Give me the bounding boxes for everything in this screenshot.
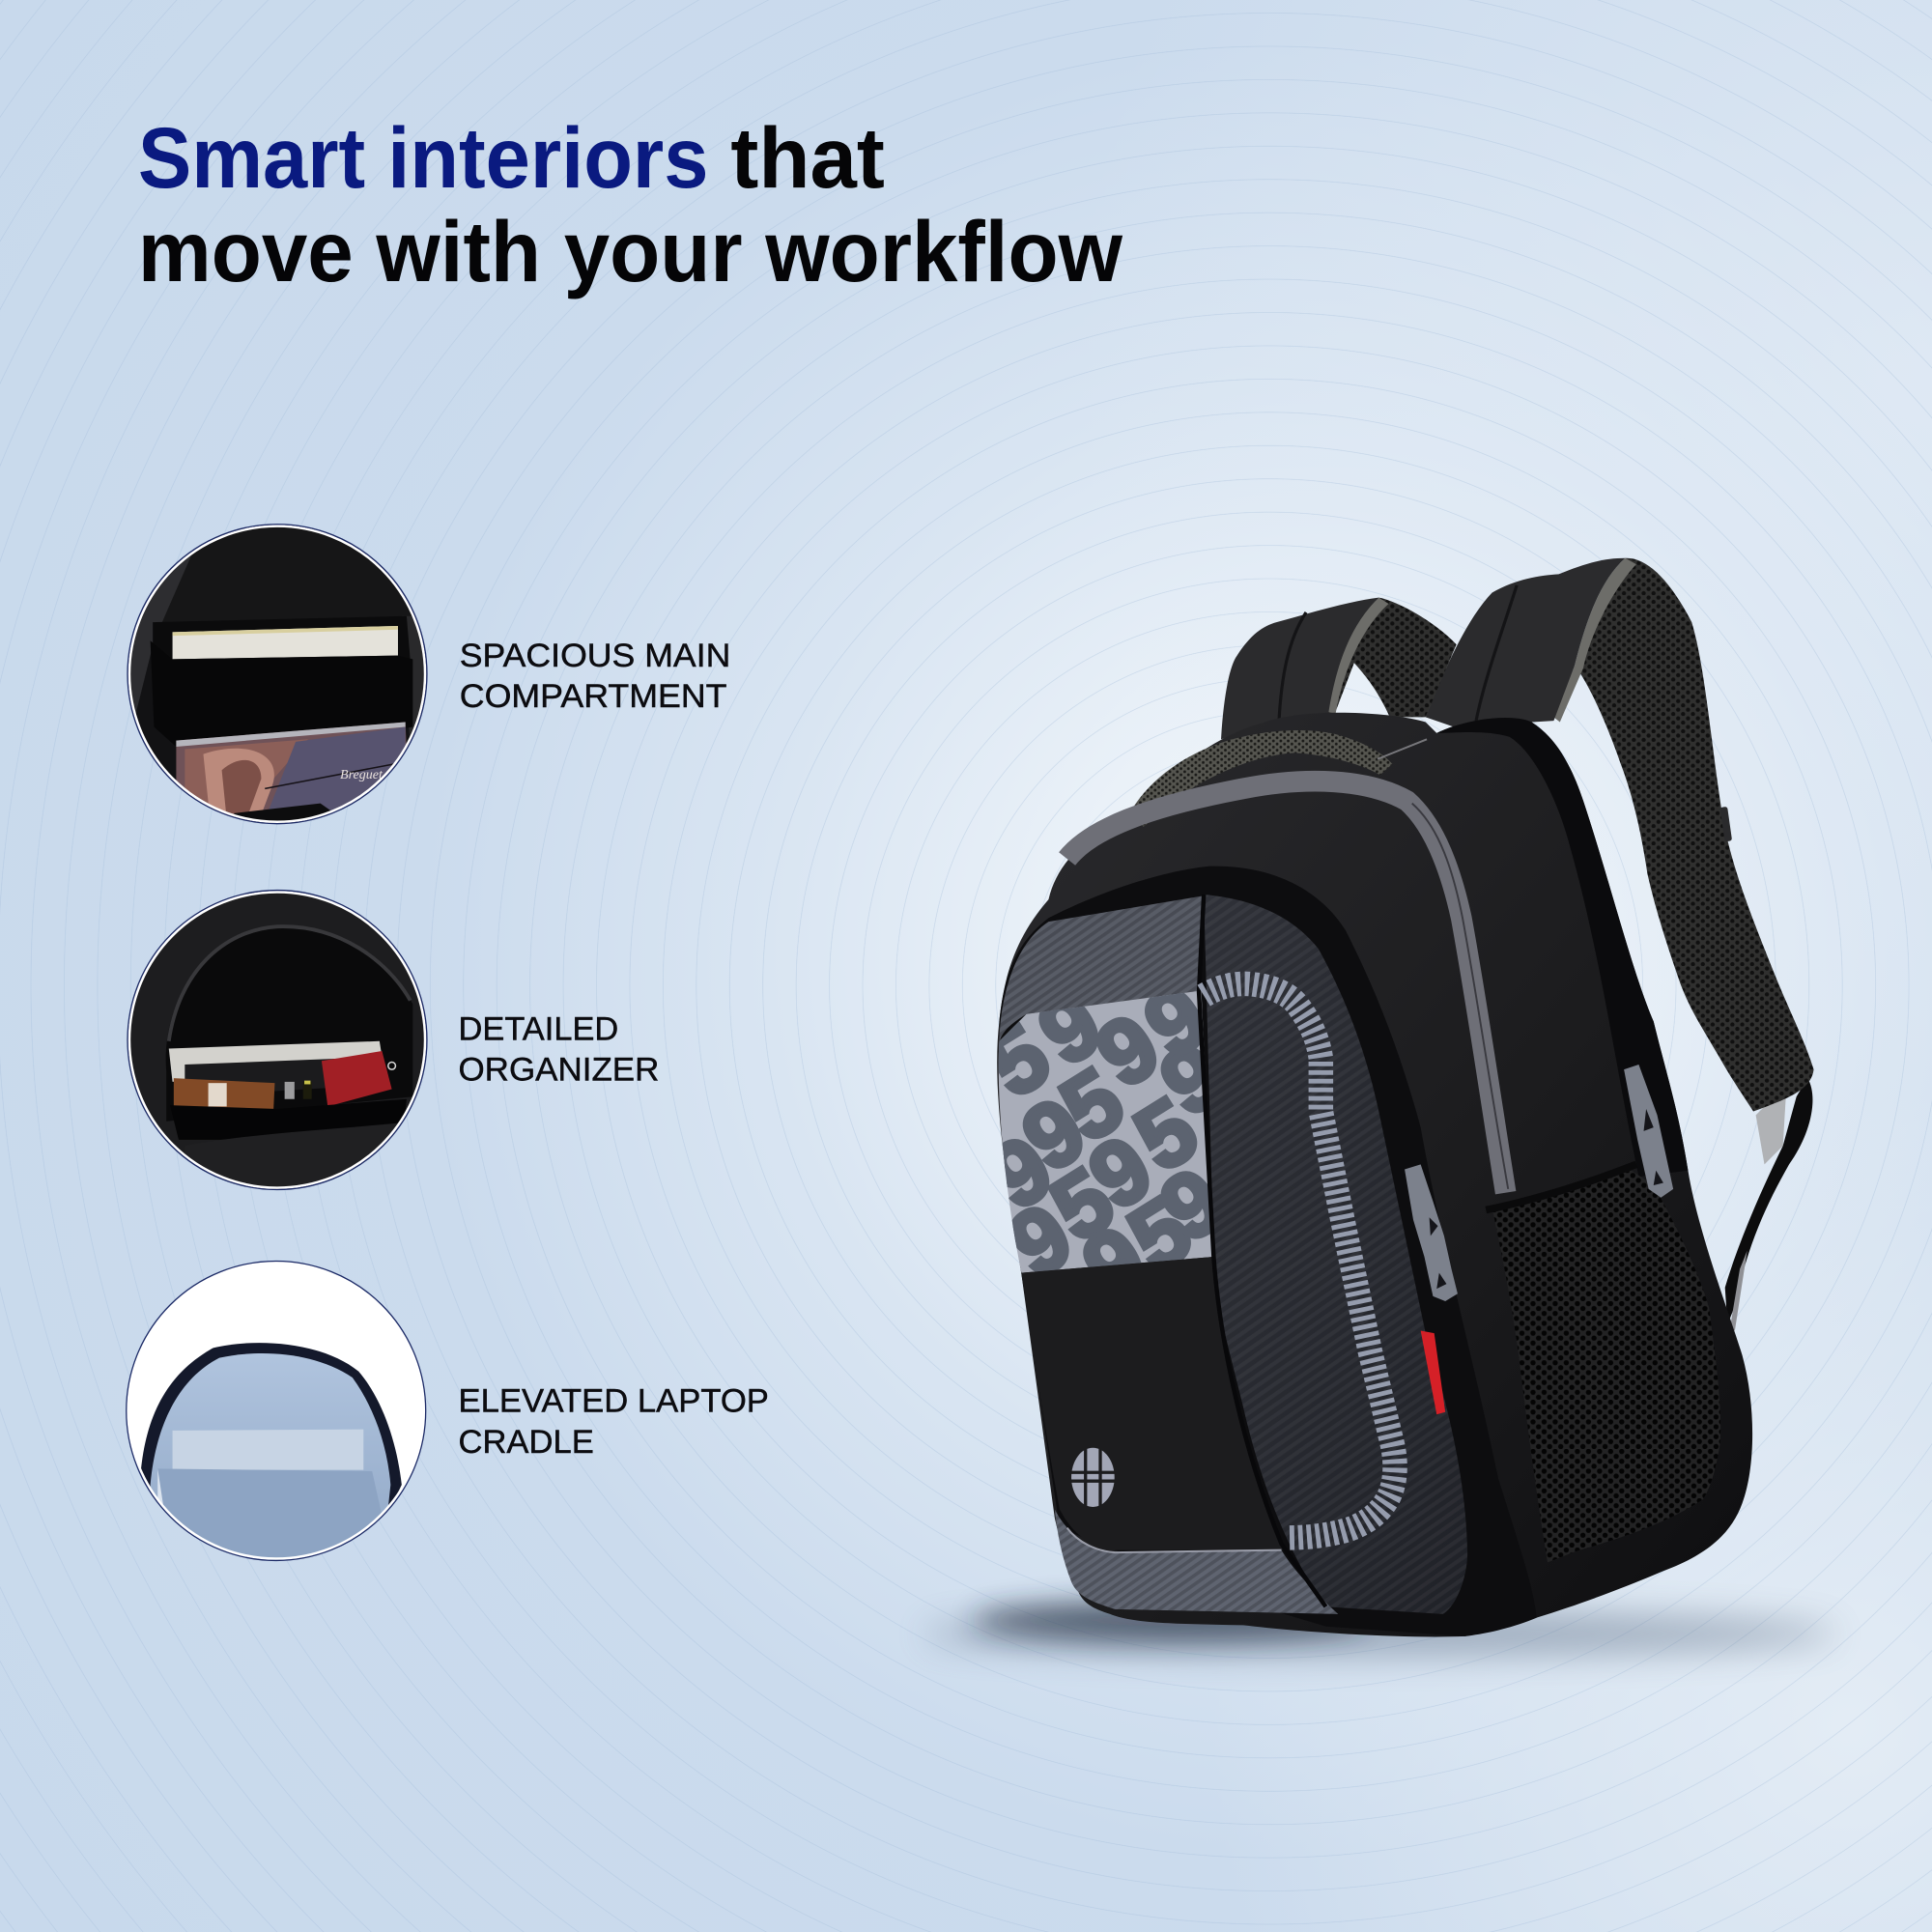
red brand tag [1421,1331,1445,1414]
label: detailed organizer: DETAILED [458,1011,618,1048]
side zipper pull [1624,1065,1673,1198]
striped track print [1204,983,1395,1538]
front zipper pull [1405,1164,1458,1301]
feature 2: detailed organizer [128,891,659,1208]
top carry handle [1131,730,1392,827]
59 print panel: 9 [1006,1078,1103,1191]
59 print panel: 9 [992,1184,1089,1297]
label: spacious main compartment: COMPARTMENT [460,678,727,715]
label: elevated laptop cradle: CRADLE [458,1424,594,1461]
seam line [1199,895,1325,1606]
59 print panel: 9 [1066,1207,1163,1320]
label: detailed organizer: ORGANIZER [458,1052,659,1089]
lower black panel [1021,1257,1289,1550]
59 print panel: 5 [1035,1149,1131,1262]
backpack product shot [924,558,1836,1656]
59 print panel [999,991,1211,1273]
59 print panel: 9 [1128,965,1225,1078]
59 print panel: 9 [1072,1117,1169,1230]
59 print panel: 9 [1022,973,1119,1086]
59 print panel: 9 [973,1117,1069,1230]
photo circle: main compartment [124,518,431,838]
label: spacious main compartment [460,638,730,715]
lower grey carbon strip [1055,1509,1338,1614]
side mesh pocket [1486,1164,1720,1562]
59 print panel: 5 [970,1005,1067,1118]
carbon front panel [1204,895,1467,1614]
back panel seam [1436,718,1688,1177]
grey zip piping [1067,739,1508,1193]
59 print panel: 9 [1080,995,1177,1108]
59 print panel: 5 [1112,1179,1208,1292]
black panel binding [999,867,1537,1636]
feature 3: elevated laptop cradle [127,1261,769,1565]
59 print panel: 5 [1044,1049,1141,1162]
title [138,109,1123,299]
feature 1: spacious main compartment [124,518,730,838]
title: that [730,109,885,206]
webbing strap [1725,1078,1812,1331]
label: elevated laptop cradle: ELEVATED LAPTOP [458,1383,769,1420]
photo circle: main compartment: Breguet [340,767,384,782]
label: spacious main compartment: SPACIOUS MAIN [460,638,730,674]
label: elevated laptop cradle [458,1383,769,1461]
title: Smart interiors [138,109,708,206]
upper grey panel [999,895,1204,1041]
title: move with your workflow [138,203,1123,299]
59 print panel: 9 [1144,1023,1240,1136]
photo circle: organizer [128,891,427,1208]
main body [997,713,1752,1636]
left shoulder strap [1221,598,1457,739]
brand logo [1070,1448,1115,1507]
59 print panel: 9 [1144,1149,1240,1262]
label: detailed organizer [458,1011,659,1089]
ground shadow [924,1601,1836,1656]
photo circle: laptop cradle [127,1261,426,1565]
59 print panel: 5 [1118,1078,1215,1191]
right shoulder strap [1426,558,1814,1112]
